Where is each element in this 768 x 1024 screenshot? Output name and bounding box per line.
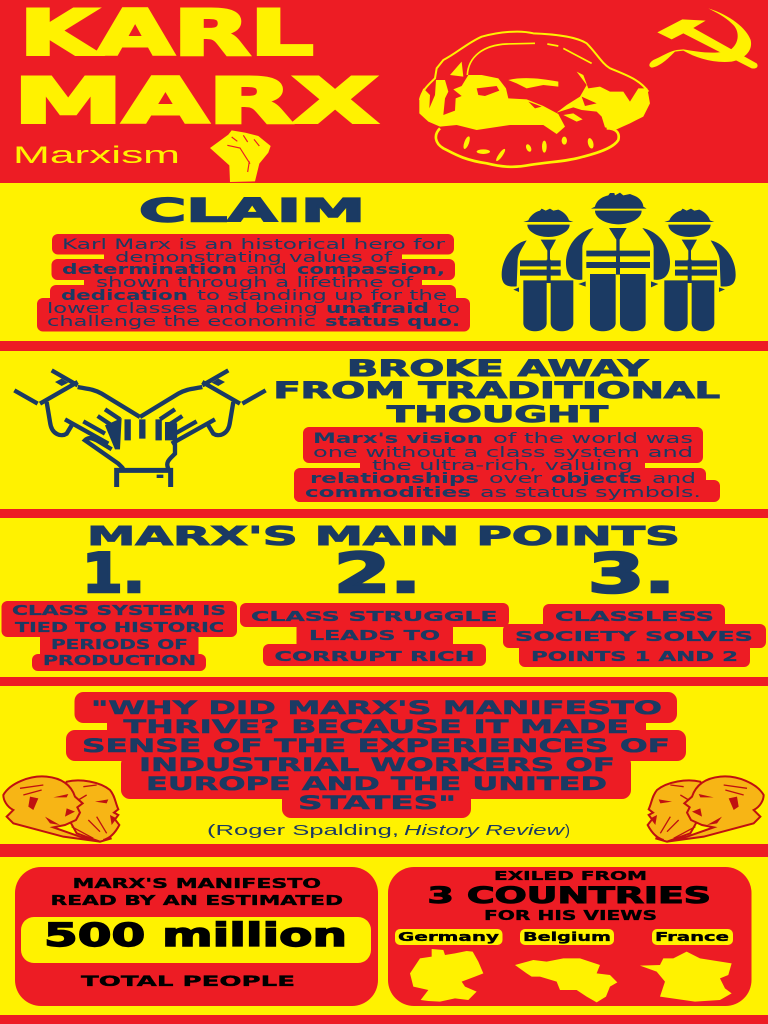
label: germany: Germany — [398, 929, 499, 944]
claim text: shown through a lifetime of — [96, 275, 415, 291]
card: exile: EXILED FROM — [494, 868, 647, 883]
card: exile: 3 COUNTRIES — [428, 884, 711, 909]
vision text — [305, 431, 701, 501]
label: belgium — [520, 929, 614, 945]
claim text: Karl Marx is an historical hero for — [62, 237, 445, 253]
icon: joined hands — [14, 370, 266, 487]
vision text backing — [294, 427, 720, 502]
vision text: relationships — [310, 471, 479, 487]
card: readers: TOTAL PEOPLE — [81, 974, 295, 990]
point 3: SOCIETY SOLVES — [515, 629, 753, 645]
quote citation: ) — [565, 822, 570, 839]
point 2: LEADS TO — [309, 628, 440, 644]
header panel — [0, 0, 768, 183]
point 1 — [2, 601, 237, 671]
quote citation: (Roger Spalding, — [207, 822, 399, 839]
panel: quote — [0, 686, 768, 844]
title — [14, 0, 378, 138]
icon: three workers — [502, 193, 736, 331]
icon: Karl Marx portrait — [419, 32, 650, 167]
label: germany — [395, 929, 502, 945]
point 2: CORRUPT RICH — [274, 649, 474, 665]
heading: broke away: THOUGHT — [387, 403, 608, 428]
point 3: CLASSLESS — [555, 609, 714, 625]
point 2 — [240, 603, 509, 666]
quote backing — [66, 692, 686, 818]
quote text — [82, 698, 670, 814]
numbers: 1. — [82, 542, 145, 605]
claim text: unafraid — [326, 301, 429, 317]
card: readers: 500 million — [44, 916, 347, 954]
heading: main points: MARX'S MAIN POINTS — [87, 522, 680, 552]
vision text: objects — [551, 471, 642, 487]
panel: main points — [0, 518, 768, 677]
claim text: determination — [62, 262, 237, 278]
panel: broke away — [0, 351, 768, 509]
claim text: to — [438, 301, 460, 317]
maps of germany, belgium, france — [410, 949, 732, 1002]
quote text: INDUSTRIAL WORKERS OF — [139, 755, 615, 776]
point 2: CLASS STRUGGLE — [251, 609, 498, 625]
numbers: 2. — [334, 542, 421, 605]
heading: broke away: FROM TRADITIONAL — [274, 379, 720, 404]
claim text: lower classes and being — [47, 301, 318, 317]
claim text: challenge the economic — [47, 314, 316, 330]
vision text: as status symbols. — [480, 485, 701, 501]
quote text: STATES" — [298, 793, 456, 814]
numbers — [82, 542, 675, 605]
point 1: CLASS SYSTEM IS — [12, 603, 226, 619]
quote text: EUROPE AND THE UNITED — [146, 774, 607, 795]
vision text: the ultra-rich, valuing — [372, 458, 633, 474]
claim text: demonstrating values of — [115, 250, 394, 266]
vision text: and — [652, 471, 696, 487]
claim text backing — [37, 234, 470, 332]
quote citation: History Review — [404, 822, 566, 839]
vision text: over — [489, 471, 542, 487]
point 1: TIED TO HISTORIC — [15, 620, 224, 636]
heading: broke away: BROKE AWAY — [347, 357, 650, 382]
point 1: PRODUCTION — [43, 653, 196, 669]
title: MARX — [14, 64, 378, 138]
vision text: one without a class system and — [313, 445, 693, 461]
point 3 — [503, 604, 766, 667]
point 3: POINTS 1 AND 2 — [531, 649, 738, 665]
icon: hammer and sickle — [649, 8, 758, 69]
icon: raised fist — [210, 130, 271, 182]
card: readers — [15, 867, 378, 1006]
heading: claim: CLAIM — [139, 192, 365, 230]
quote text: "WHY DID MARX'S MANIFESTO — [91, 698, 662, 719]
label: france: France — [655, 929, 729, 944]
vision text: commodities — [305, 485, 471, 501]
label: belgium: Belgium — [523, 929, 611, 944]
panel: claim — [0, 183, 768, 341]
label: france — [652, 929, 733, 945]
claim text: status quo. — [325, 314, 460, 330]
card: exile: FOR HIS VIEWS — [484, 909, 657, 924]
icon: busts right — [648, 776, 764, 842]
panel: statistics — [0, 857, 768, 1015]
card: exile — [388, 867, 752, 1006]
vision text: of the world was — [493, 431, 693, 447]
icon: busts left — [3, 776, 119, 842]
claim text: to standing up for the — [197, 288, 447, 304]
numbers: 3. — [588, 542, 675, 605]
claim text: compassion, — [297, 262, 445, 278]
point 1: PERIODS OF — [51, 637, 188, 653]
claim text: and — [246, 262, 287, 278]
subtitle: Marxism — [13, 142, 180, 169]
quote text: SENSE OF THE EXPERIENCES OF — [82, 736, 670, 757]
vision text: Marx's vision — [313, 431, 483, 447]
card: readers: MARX'S MANIFESTO — [72, 877, 321, 892]
heading: broke away — [274, 357, 720, 428]
claim text — [47, 237, 460, 330]
card: readers: READ BY AN ESTIMATED — [50, 894, 343, 909]
claim text: dedication — [61, 288, 188, 304]
quote text: THRIVE? BECAUSE IT MADE — [124, 717, 629, 738]
quote citation — [207, 822, 570, 839]
